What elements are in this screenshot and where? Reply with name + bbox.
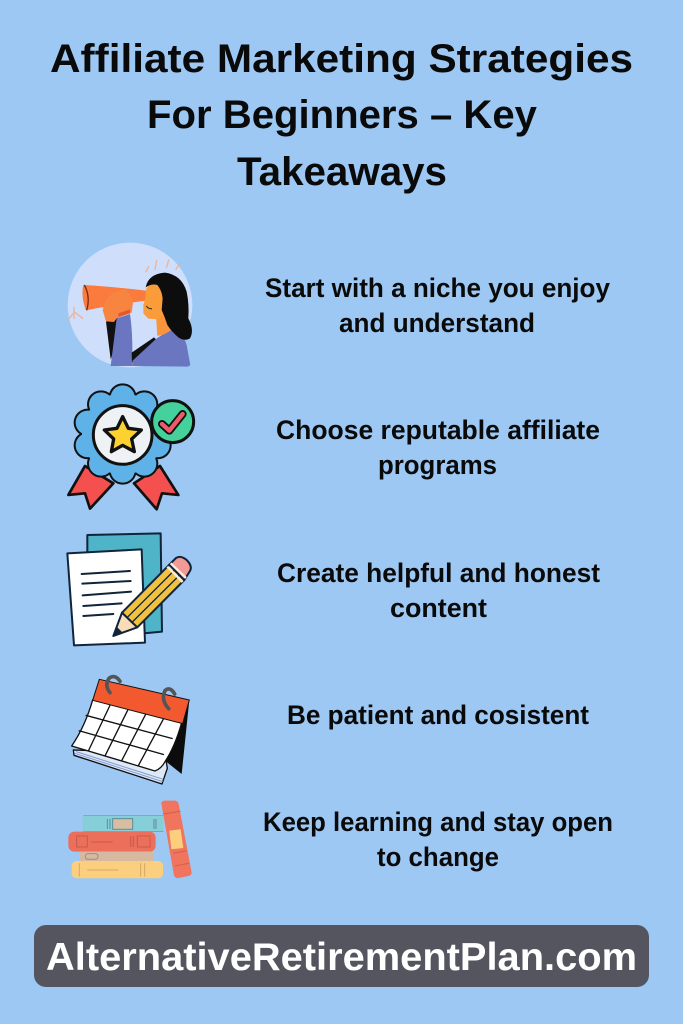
title [50,37,633,194]
text: keep learning: to change [377,842,499,872]
footer website banner [34,925,649,987]
text: keep learning: Keep learning and stay open [263,807,613,837]
icon: calendar [72,677,189,784]
text: create helpful content: Create helpful and honest [277,558,600,588]
title: For Beginners – Key [147,93,538,137]
title: Affiliate Marketing Strategies [50,37,633,81]
text: choose reputable programs [276,415,600,480]
text: keep learning [263,807,613,872]
text: start with a niche [265,273,610,338]
icon: award ribbon with star and check [68,383,194,509]
text: create helpful content: content [390,593,487,623]
footer website banner: AlternativeRetirementPlan.com [46,936,637,979]
title: Takeaways [237,150,447,194]
text: start with a niche: and understand [339,308,535,338]
text: create helpful content [277,558,600,623]
text: be patient: Be patient and cosistent [287,700,589,730]
text: start with a niche: Start with a niche you enjoy [265,273,610,303]
text: choose reputable programs: Choose reputable affiliate [276,415,600,445]
text: choose reputable programs: programs [378,450,497,480]
icon: stack of books [68,801,192,878]
icon: paper and pencil [67,533,191,645]
icon: woman with megaphone [68,243,192,367]
